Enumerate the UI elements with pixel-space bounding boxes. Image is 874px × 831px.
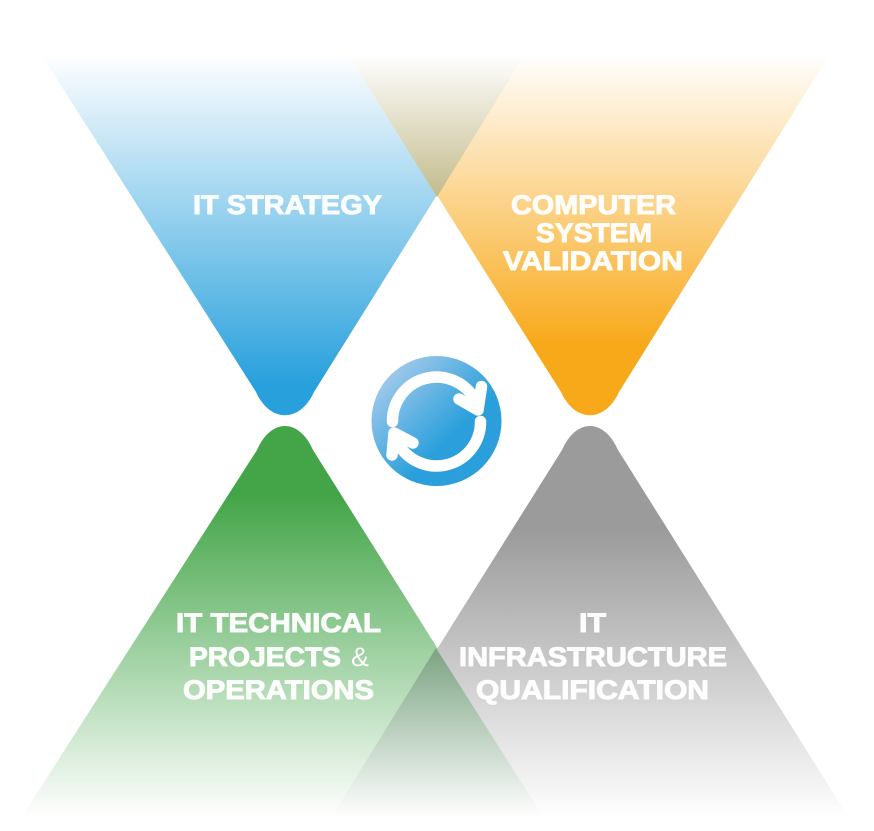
- panel: computer system validation triangle: [348, 54, 830, 415]
- overlap: top: [348, 54, 525, 197]
- heading: IT technical projects and operations: OPERATIONS: [183, 675, 374, 705]
- heading: IT technical projects and operations: &: [351, 642, 369, 672]
- heading: IT technical projects and operations: [176, 608, 381, 705]
- panel: IT infrastructure triangle: [331, 426, 849, 818]
- heading: computer system validation: SYSTEM: [536, 218, 652, 248]
- heading: IT infrastructure qualification: [459, 608, 727, 705]
- heading: computer system validation: COMPUTER: [511, 190, 676, 220]
- heading: IT infrastructure qualification: INFRASTRUCTURE: [459, 642, 727, 672]
- heading: IT technical projects and operations: PROJECTS: [189, 642, 341, 672]
- overlap: bottom: [331, 648, 544, 818]
- heading: IT strategy: IT STRATEGY: [193, 190, 382, 220]
- panel: IT technical projects triangle: [21, 426, 544, 818]
- panel: IT strategy triangle: [41, 54, 525, 415]
- heading: computer system validation: [503, 190, 683, 276]
- heading: IT technical projects and operations: IT TECHNICAL: [176, 608, 381, 638]
- heading: computer system validation: VALIDATION: [503, 246, 683, 276]
- heading: IT infrastructure qualification: IT: [579, 608, 607, 638]
- heading: IT infrastructure qualification: QUALIFICATION: [476, 675, 709, 705]
- icon: refresh cycle: [372, 356, 502, 486]
